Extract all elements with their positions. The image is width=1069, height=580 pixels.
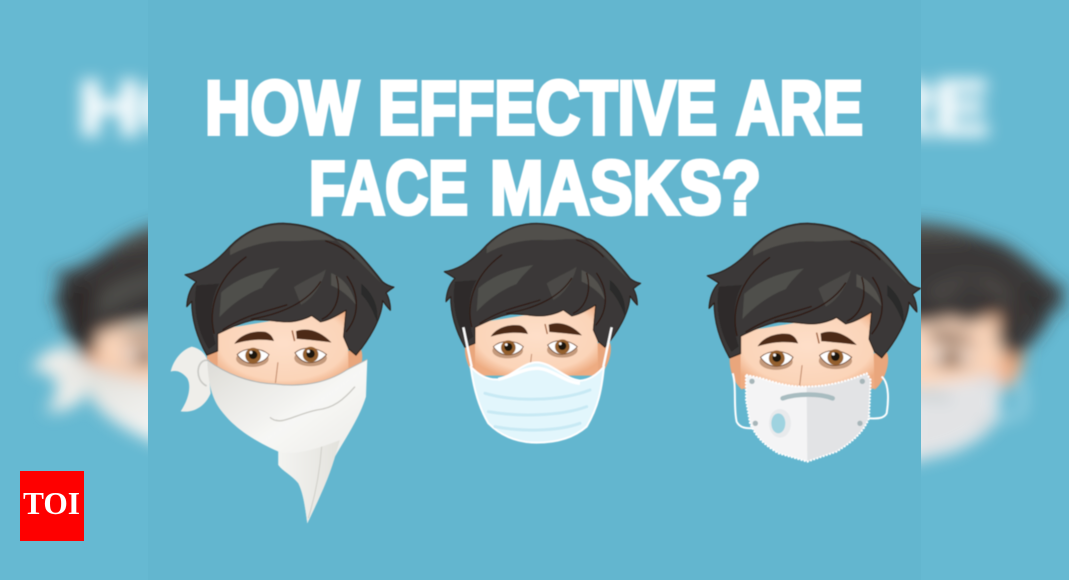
main scene: title and three faces (171, 66, 920, 523)
blurred stretched side panels (24, 68, 1069, 472)
TOI logo: TOI (23, 485, 80, 521)
central panel (148, 0, 921, 580)
TOI logo (20, 471, 84, 541)
